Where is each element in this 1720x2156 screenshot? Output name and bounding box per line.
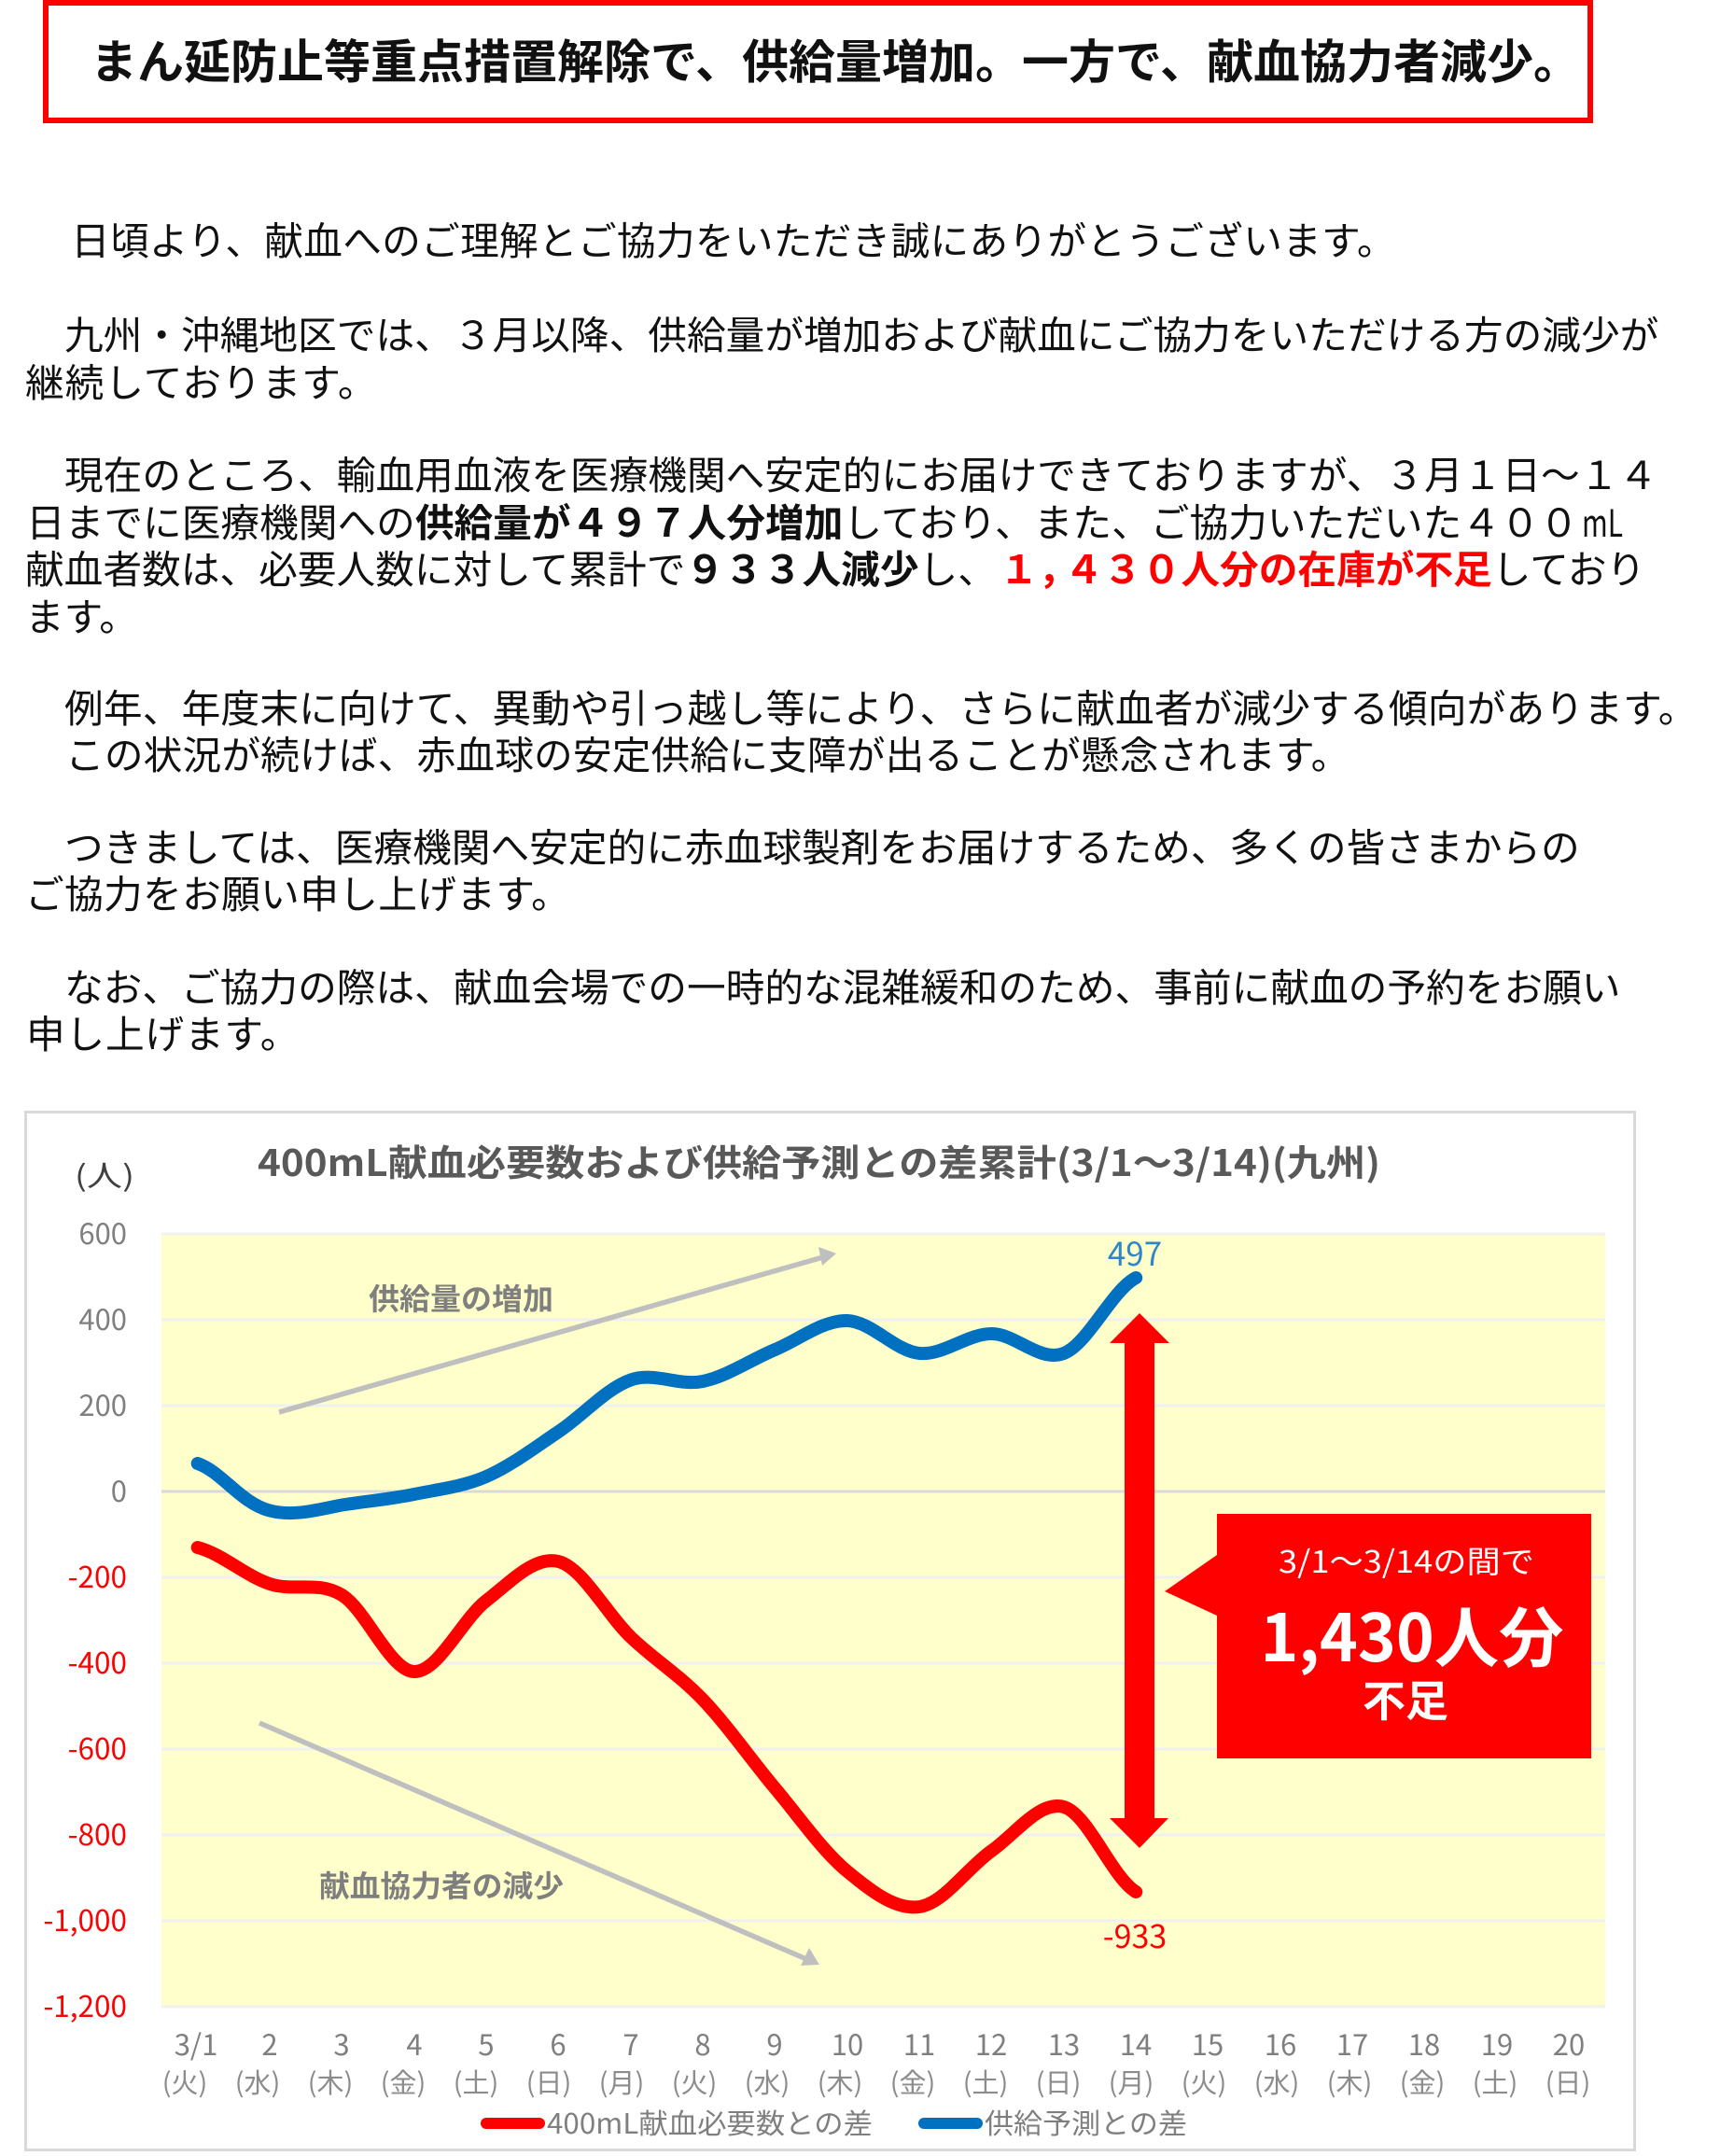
x axis labels: (日)	[526, 2062, 571, 2101]
callout: shortage	[1165, 1514, 1591, 1758]
x axis labels: 5	[478, 2022, 495, 2064]
text block: current stock: 献血者数は、必要人数に対して累計で９３３人減少し、１，４３０人分の在庫が不足しており	[25, 539, 1645, 595]
callout: shortage: 3/1～3/14の間で	[1279, 1537, 1534, 1582]
title banner	[46, 3, 1590, 120]
x axis labels: 9	[766, 2022, 783, 2064]
x axis labels: 15	[1192, 2022, 1224, 2064]
panel: chart	[26, 1113, 1635, 2150]
title banner: まん延防止等重点措置解除で、供給量増加。一方で、献血協力者減少。	[91, 25, 1580, 92]
text block: current stock: 日までに医療機関への供給量が４９７人分増加しており、また、ご協力いただいた４００	[26, 493, 1578, 549]
text block: outlook: この状況が続けば、赤血球の安定供給に支障が出ることが懸念されます。	[65, 725, 1349, 781]
x axis labels: (水)	[1254, 2062, 1299, 2101]
x axis labels: (木)	[818, 2062, 862, 2101]
text block: request: つきましては、医療機関へ安定的に赤血球製剤をお届けするため、多くの皆さまからの	[64, 818, 1580, 874]
x axis labels: (水)	[745, 2062, 790, 2101]
y axis labels: 200	[78, 1382, 127, 1424]
text block: current stock	[25, 445, 1657, 643]
x axis labels: 3/1	[175, 2022, 217, 2064]
x axis labels: (金)	[381, 2062, 426, 2101]
text block: current stock: mL	[1582, 494, 1623, 548]
callout: shortage: 1,430人分	[1260, 1587, 1564, 1681]
x axis labels: 17	[1336, 2022, 1368, 2064]
line: supply forecast difference	[198, 1278, 1136, 1513]
x axis labels: 6	[550, 2022, 566, 2064]
x axis labels: 7	[622, 2022, 639, 2064]
x axis labels: (月)	[1109, 2062, 1154, 2101]
x axis labels: 19	[1481, 2022, 1513, 2064]
x axis labels: (木)	[1327, 2062, 1372, 2101]
legend: 供給予測との差	[985, 2101, 1187, 2142]
line: required donations difference	[198, 1547, 1136, 1907]
x axis labels: (土)	[963, 2062, 1008, 2101]
text block: request	[25, 818, 1580, 920]
x axis labels: (火)	[162, 2062, 207, 2101]
x axis labels: 16	[1265, 2022, 1296, 2064]
arrow: donor decrease	[259, 1723, 819, 1966]
x axis labels: (金)	[890, 2062, 935, 2101]
y axis labels: 400	[78, 1296, 127, 1338]
text block: reservation: 申し上げます。	[26, 1004, 300, 1060]
chart title: 400mL献血必要数および供給予測との差累計(3/1～3/14)(九州)	[258, 1135, 1380, 1187]
x axis labels	[162, 2022, 1590, 2101]
data label: -933: -933	[1103, 1911, 1167, 1957]
x axis labels: 20	[1553, 2022, 1585, 2064]
text block: reservation: なお、ご協力の際は、献血会場での一時的な混雑緩和のため、事前に献血の予約をお願い	[64, 958, 1620, 1014]
y axis labels: 0	[111, 1468, 127, 1510]
label: supply increase: 供給量の増加	[369, 1276, 553, 1319]
arrow: gap double arrow	[1110, 1313, 1169, 1848]
x axis labels: (月)	[599, 2062, 644, 2101]
x axis labels: (火)	[1182, 2062, 1226, 2101]
x axis labels: 13	[1048, 2022, 1080, 2064]
x axis labels: 8	[694, 2022, 711, 2064]
y axis labels: -1,200	[43, 1983, 127, 2026]
text block: current stock: ます。	[25, 587, 138, 643]
text block: situation	[25, 305, 1658, 409]
text block: situation: 九州・沖縄地区では、３月以降、供給量が増加および献血にご協力をいただける方の減少が	[64, 305, 1658, 361]
legend: 400mL献血必要数との差	[547, 2101, 873, 2142]
y axis labels: 600	[78, 1211, 127, 1253]
text block: greeting: 日頃より、献血へのご理解とご協力をいただき誠にありがとうございます。	[71, 211, 1396, 267]
x axis labels: (火)	[672, 2062, 717, 2101]
y axis unit: (人)	[75, 1153, 134, 1195]
x axis labels: 4	[406, 2022, 423, 2064]
text block: reservation	[26, 958, 1620, 1060]
text block: outlook: 例年、年度末に向けて、異動や引っ越し等により、さらに献血者が減少する傾向があります。	[64, 679, 1698, 735]
x axis labels: (土)	[454, 2062, 498, 2101]
x axis labels: 18	[1408, 2022, 1440, 2064]
x axis labels: (土)	[1473, 2062, 1517, 2101]
x axis labels: 10	[832, 2022, 863, 2064]
x axis labels: 12	[975, 2022, 1007, 2064]
text block: current stock: 現在のところ、輸血用血液を医療機関へ安定的にお届けできておりますが、３月１日～１４	[64, 445, 1657, 501]
plot area	[161, 1234, 1605, 2007]
x axis labels: (日)	[1545, 2062, 1590, 2101]
callout: shortage: 不足	[1363, 1668, 1448, 1729]
x axis labels: 3	[333, 2022, 350, 2064]
x axis labels: (木)	[308, 2062, 353, 2101]
label: donor decrease: 献血協力者の減少	[319, 1863, 564, 1906]
y axis labels: -400	[68, 1640, 127, 1683]
legend	[486, 2101, 1187, 2142]
text block: situation: 継続しております。	[25, 353, 378, 409]
y axis labels	[43, 1211, 127, 2026]
x axis labels: 14	[1120, 2022, 1152, 2064]
y axis labels: -600	[68, 1726, 127, 1769]
data label: 497: 497	[1108, 1228, 1162, 1276]
arrow: supply trend	[279, 1247, 836, 1412]
y axis labels: -1,000	[43, 1897, 127, 1940]
x axis labels: 11	[903, 2022, 935, 2064]
text block: outlook	[64, 679, 1698, 781]
x axis labels: (金)	[1400, 2062, 1445, 2101]
x axis labels: 2	[261, 2022, 278, 2064]
x axis labels: (日)	[1036, 2062, 1081, 2101]
text block: request: ご協力をお願い申し上げます。	[25, 864, 570, 920]
y axis labels: -800	[68, 1812, 127, 1855]
y axis labels: -200	[68, 1554, 127, 1597]
x axis labels: (水)	[235, 2062, 280, 2101]
